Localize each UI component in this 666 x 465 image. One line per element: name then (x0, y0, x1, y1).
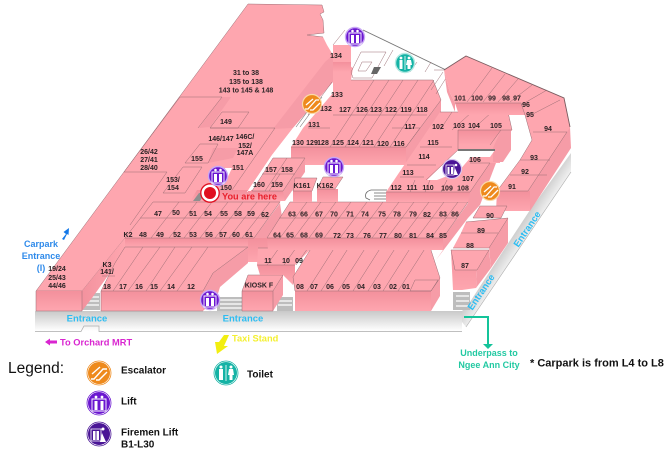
unit numbers: 146C/ (236, 134, 254, 141)
unit numbers: 91 (508, 184, 516, 191)
unit numbers: 94 (544, 126, 552, 133)
unit numbers: 50 (172, 210, 180, 217)
unit numbers: 78 (393, 212, 401, 218)
unit numbers: 152/ (238, 143, 252, 150)
legend: toilet: Toilet (247, 370, 274, 380)
entrance label west: Entrance (67, 314, 107, 324)
unit numbers: 06 (326, 284, 334, 291)
unit numbers: 57 (219, 232, 227, 239)
map: block 47 to 62 (125, 202, 282, 262)
unit numbers: 92 (521, 169, 529, 176)
unit numbers: 101 (454, 96, 466, 102)
you are here marker (201, 184, 277, 202)
unit numbers: 84 (426, 233, 434, 240)
unit numbers: 16 (135, 284, 143, 291)
legend: firemen lift: Firemen Lift (121, 428, 179, 438)
unit numbers: 49 (156, 232, 164, 239)
unit numbers: 134 (330, 53, 342, 60)
unit numbers: 93 (530, 155, 538, 162)
unit numbers: 119 (400, 107, 412, 114)
unit numbers: 157 (265, 167, 277, 174)
unit numbers: 154 (167, 185, 179, 192)
unit numbers: 100 (471, 96, 483, 102)
legend: firemen lift: B1-L30 (121, 440, 155, 450)
unit numbers: 88 (466, 243, 474, 250)
unit numbers: 114 (418, 154, 430, 161)
unit numbers: 07 (310, 284, 318, 291)
unit numbers: 44/46 (48, 283, 66, 290)
unit numbers: 109 (441, 186, 453, 192)
unit numbers: 53 (189, 232, 197, 239)
unit numbers: 126 (356, 107, 368, 114)
unit numbers: 103 (453, 123, 465, 130)
entrance label south-east: Entrance (466, 273, 498, 312)
unit numbers: 106 (469, 157, 481, 164)
unit numbers: 110 (422, 185, 434, 192)
unit numbers: 19/24 (48, 266, 66, 273)
unit numbers: K161 (294, 183, 310, 190)
unit numbers: 149 (220, 119, 232, 126)
unit numbers: 75 (378, 212, 386, 218)
unit numbers: K3 (103, 262, 112, 269)
unit numbers: 09 (295, 258, 303, 265)
unit numbers: 60 (232, 232, 240, 239)
unit numbers: 81 (409, 233, 417, 240)
unit numbers: 132 (320, 106, 332, 113)
taxi stand label: Taxi Stand (232, 334, 279, 344)
unit numbers: 155 (191, 156, 203, 163)
underpass label: Underpass to (460, 348, 518, 358)
unit numbers: 26/42 (140, 149, 158, 156)
unit numbers: 124 (347, 140, 359, 147)
unit numbers: 51 (189, 211, 197, 218)
unit numbers: 95 (526, 112, 534, 119)
unit numbers: 141/ (100, 269, 114, 276)
map: upper service core outline (333, 30, 446, 94)
unit numbers: 143 to 145 & 148 (219, 88, 273, 94)
unit numbers: 86 (451, 212, 459, 218)
unit numbers: 66 (300, 212, 308, 218)
unit numbers: 68 (300, 232, 308, 240)
unit numbers: 52 (173, 232, 181, 239)
unit numbers: 105 (490, 123, 502, 130)
arrow: to Orchard MRT (45, 338, 57, 346)
unit numbers: 62 (261, 212, 269, 219)
unit numbers: 147A (237, 150, 253, 157)
unit numbers: 90 (486, 213, 494, 220)
unit numbers: 129 (306, 140, 318, 147)
unit numbers: 133 (331, 92, 343, 99)
map: kiosk K161 (293, 178, 317, 202)
map: block 102 to 115 (386, 112, 512, 218)
unit numbers: 111 (407, 185, 418, 192)
map: block 88 and 89 (453, 218, 508, 268)
unit numbers: 28/40 (140, 165, 158, 172)
map: block 18 to 12 (101, 247, 248, 311)
legend heading: Legend: (8, 360, 64, 377)
unit numbers: 153/ (166, 177, 180, 184)
unit numbers: 77 (379, 233, 387, 240)
map: block 90 (473, 206, 507, 218)
unit numbers: 70 (330, 212, 338, 218)
unit numbers: 127 (339, 107, 351, 114)
unit numbers: 87 (461, 263, 469, 270)
unit numbers: 97 (513, 96, 521, 102)
map: north-east block 91 to 101 (444, 56, 571, 211)
unit numbers: 04 (357, 284, 365, 291)
unit numbers: 64 (273, 232, 281, 240)
unit numbers: 116 (393, 141, 405, 148)
icon: lift atrium (324, 158, 344, 176)
map: kiosk F (242, 275, 283, 311)
unit numbers: 158 (281, 167, 293, 174)
map: block 08 to 01 (293, 247, 440, 311)
unit numbers: 15 (150, 284, 158, 291)
unit numbers: 146/147 (208, 136, 234, 143)
icon: escalator at 132 (302, 94, 322, 114)
to Orchard MRT label: To Orchard MRT (60, 338, 132, 348)
unit numbers: 73 (346, 233, 354, 240)
unit numbers: 131 (308, 122, 320, 129)
unit numbers: 47 (154, 211, 162, 218)
legend: escalator: Escalator (121, 366, 166, 376)
unit numbers: 125 (332, 140, 344, 147)
unit numbers: 14 (167, 284, 175, 291)
arrow: underpass (464, 317, 493, 349)
unit numbers: 02 (389, 284, 397, 291)
unit numbers: 63 (288, 212, 296, 218)
unit numbers: 56 (205, 232, 213, 239)
unit numbers: 69 (315, 232, 323, 240)
unit numbers: 03 (373, 284, 381, 291)
map: block 11 to 09 (257, 248, 312, 285)
unit numbers: 31 to 38 (233, 70, 259, 77)
map: kiosk K162 (317, 177, 343, 202)
unit numbers: 82 (423, 212, 431, 219)
unit numbers: 10 (282, 258, 290, 265)
legend: lift (87, 391, 137, 415)
unit numbers: 96 (522, 102, 530, 109)
map: west wing with central atrium (36, 4, 333, 311)
icon: toilet top (396, 54, 414, 72)
unit numbers: 67 (315, 212, 323, 218)
legend: escalator (87, 361, 166, 385)
unit numbers: 11 (264, 258, 272, 265)
unit numbers: 17 (119, 284, 127, 291)
unit numbers: 128 (317, 140, 329, 147)
unit numbers: 54 (204, 211, 212, 218)
unit numbers: 83 (439, 212, 447, 218)
unit numbers (48, 53, 552, 291)
unit numbers: 160 (253, 182, 265, 189)
unit numbers: 113 (402, 170, 414, 177)
unit numbers: 80 (394, 233, 402, 240)
unit numbers: 104 (468, 123, 480, 130)
unit numbers: 72 (333, 233, 341, 240)
map: block 63 to 86 (267, 202, 468, 260)
legend: lift: Lift (121, 396, 137, 408)
unit numbers: 76 (363, 233, 371, 240)
icon: escalator at 108 (480, 182, 500, 200)
unit numbers: 71 (346, 212, 354, 218)
unit numbers: 18 (103, 284, 111, 291)
unit numbers: 121 (362, 140, 374, 147)
unit numbers: 79 (409, 212, 417, 218)
unit numbers: K2 (124, 232, 133, 239)
unit numbers: 99 (488, 96, 496, 102)
carpark entrance label: Carpark (24, 239, 59, 249)
map: atrium escalator (366, 190, 387, 200)
unit numbers: 27/41 (140, 157, 158, 164)
legend: firemen lift (87, 422, 179, 450)
unit numbers: 150 (220, 185, 232, 192)
icon: firemen lift at 109 (442, 160, 462, 178)
entrance label centre: Entrance (223, 314, 263, 324)
unit numbers: 65 (286, 232, 294, 240)
unit numbers: 58 (234, 211, 242, 218)
unit numbers: 123 (370, 107, 382, 114)
unit numbers: 112 (390, 185, 402, 192)
unit numbers: 05 (342, 284, 350, 291)
unit numbers: 01 (402, 284, 410, 291)
unit numbers: 59 (247, 211, 255, 218)
unit numbers: 115 (427, 140, 439, 147)
unit numbers: 122 (385, 107, 397, 114)
arrow: carpark entrance (62, 228, 69, 240)
unit numbers: 89 (477, 228, 485, 235)
unit numbers: 48 (139, 232, 147, 239)
underpass label (458, 348, 520, 370)
icon: lift near 150 (208, 166, 228, 186)
unit numbers: 85 (439, 233, 447, 240)
you are here marker: You are here (222, 192, 277, 202)
legend: toilet (214, 361, 274, 385)
unit numbers: 107 (462, 176, 474, 183)
carpark entrance label: (I) (37, 263, 45, 273)
carpark entrance label (22, 239, 60, 273)
arrow: taxi stand (215, 335, 229, 354)
unit numbers: 98 (502, 96, 510, 102)
unit numbers: 135 to 138 (229, 79, 263, 86)
unit numbers: 25/43 (48, 275, 66, 282)
unit numbers: KIOSK F (245, 282, 274, 290)
unit numbers: 12 (187, 284, 195, 291)
carpark entrance label: Entrance (22, 251, 60, 261)
unit numbers: 130 (292, 140, 304, 147)
unit numbers: 74 (361, 212, 369, 218)
entrance label east: Entrance (512, 210, 544, 249)
map: block 87 (451, 250, 491, 290)
underpass label: Ngee Ann City (458, 360, 520, 370)
sidewalk: front and east pavement (35, 153, 571, 332)
icon: lift top (346, 28, 364, 46)
unit numbers: 55 (220, 211, 228, 218)
unit numbers: 61 (245, 232, 253, 239)
unit numbers: 120 (377, 141, 389, 148)
unit numbers: 108 (457, 186, 469, 192)
unit numbers: 102 (432, 124, 444, 131)
map: block 157 to 160 (248, 158, 305, 201)
unit numbers: 118 (416, 107, 428, 114)
unit numbers: 08 (296, 284, 304, 291)
unit numbers: 117 (404, 124, 416, 131)
carpark note: * Carpark is from L4 to L8 (530, 358, 664, 370)
unit numbers: K162 (317, 183, 333, 190)
unit numbers: 159 (271, 182, 283, 189)
icon: lift front (200, 290, 220, 310)
map: central block 116 to 133 (291, 45, 441, 165)
unit numbers: 151 (232, 165, 244, 172)
